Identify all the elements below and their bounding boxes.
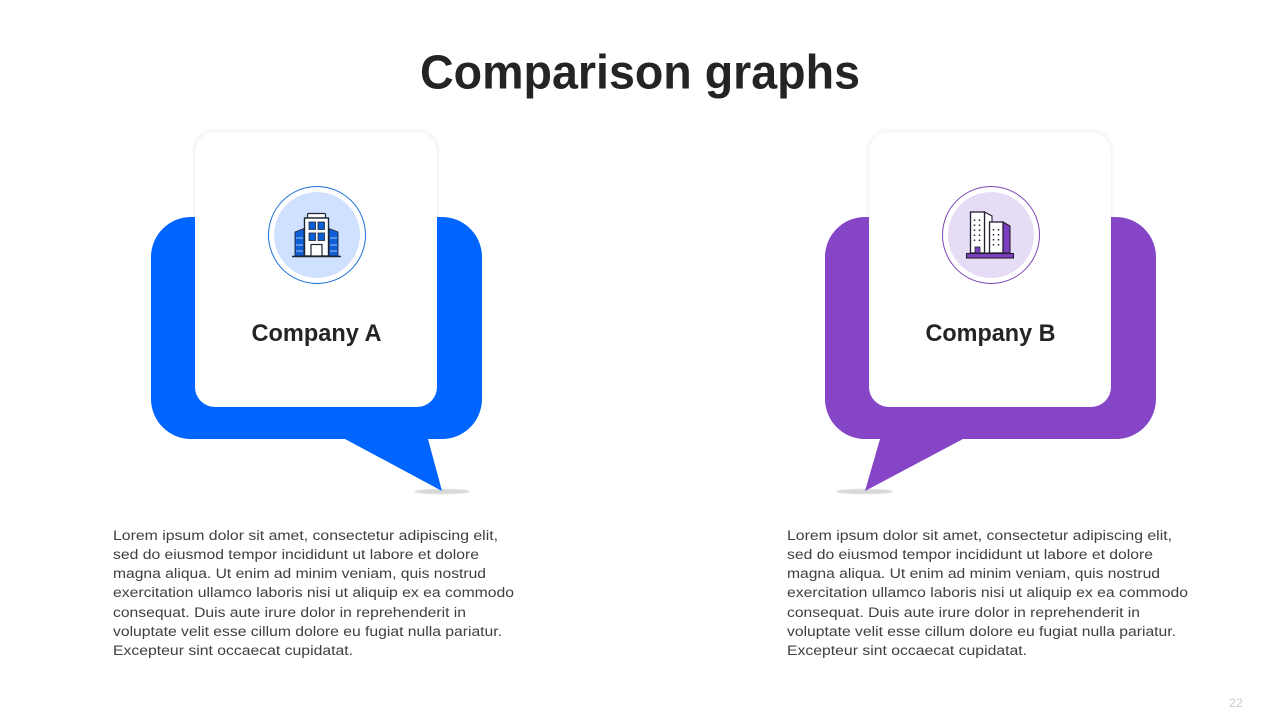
tail shadow A: [414, 489, 470, 494]
panel: Company B: [825, 130, 1156, 494]
card halo A: [193, 130, 439, 250]
card A: [195, 132, 437, 407]
title: Comparison graphs: [420, 46, 860, 100]
text block: Company B description: [787, 528, 1188, 659]
text block: Company A description: consequat. Duis aute irure dolor in reprehenderit in: [113, 605, 466, 621]
text block: Company B description: voluptate velit esse cillum dolore eu fugiat nulla pariatur.: [787, 624, 1176, 640]
text block: Company A description: [113, 528, 514, 659]
icon: city buildings B: [942, 186, 1040, 284]
speech bubble A: [151, 217, 482, 491]
text block: Company B description: sed do eiusmod tempor incididunt ut labore et dolore: [787, 547, 1153, 563]
panel: Company A: [151, 130, 482, 494]
text block: Company A description: magna aliqua. Ut enim ad minim veniam, quis nostrud: [113, 566, 486, 582]
text block: Company A description: sed do eiusmod tempor incididunt ut labore et dolore: [113, 547, 479, 563]
icon: office building A: [268, 186, 366, 284]
text block: Company B description: Lorem ipsum dolor sit amet, consectetur adipiscing elit,: [787, 528, 1172, 544]
text block: Company B description: magna aliqua. Ut enim ad minim veniam, quis nostrud: [787, 566, 1160, 582]
text block: Company A description: voluptate velit esse cillum dolore eu fugiat nulla pariatur.: [113, 624, 502, 640]
text block: Company B description: consequat. Duis aute irure dolor in reprehenderit in: [787, 605, 1140, 621]
card halo B: [867, 130, 1113, 250]
text block: Company B description: exercitation ullamco laboris nisi ut aliquip ex ea commodo: [787, 585, 1188, 601]
text block: Company A description: Excepteur sint occaecat cupidatat.: [113, 643, 353, 659]
text block: Company B description: Excepteur sint occaecat cupidatat.: [787, 643, 1027, 659]
page number: 22: [1229, 698, 1243, 710]
tail shadow B: [836, 489, 893, 494]
text block: Company A description: exercitation ullamco laboris nisi ut aliquip ex ea commodo: [113, 585, 514, 601]
speech bubble B: [825, 217, 1156, 491]
card B: [869, 132, 1111, 407]
label: Company A: Company A: [252, 320, 382, 347]
label: Company B: Company B: [926, 320, 1056, 347]
text block: Company A description: Lorem ipsum dolor sit amet, consectetur adipiscing elit,: [113, 528, 498, 544]
